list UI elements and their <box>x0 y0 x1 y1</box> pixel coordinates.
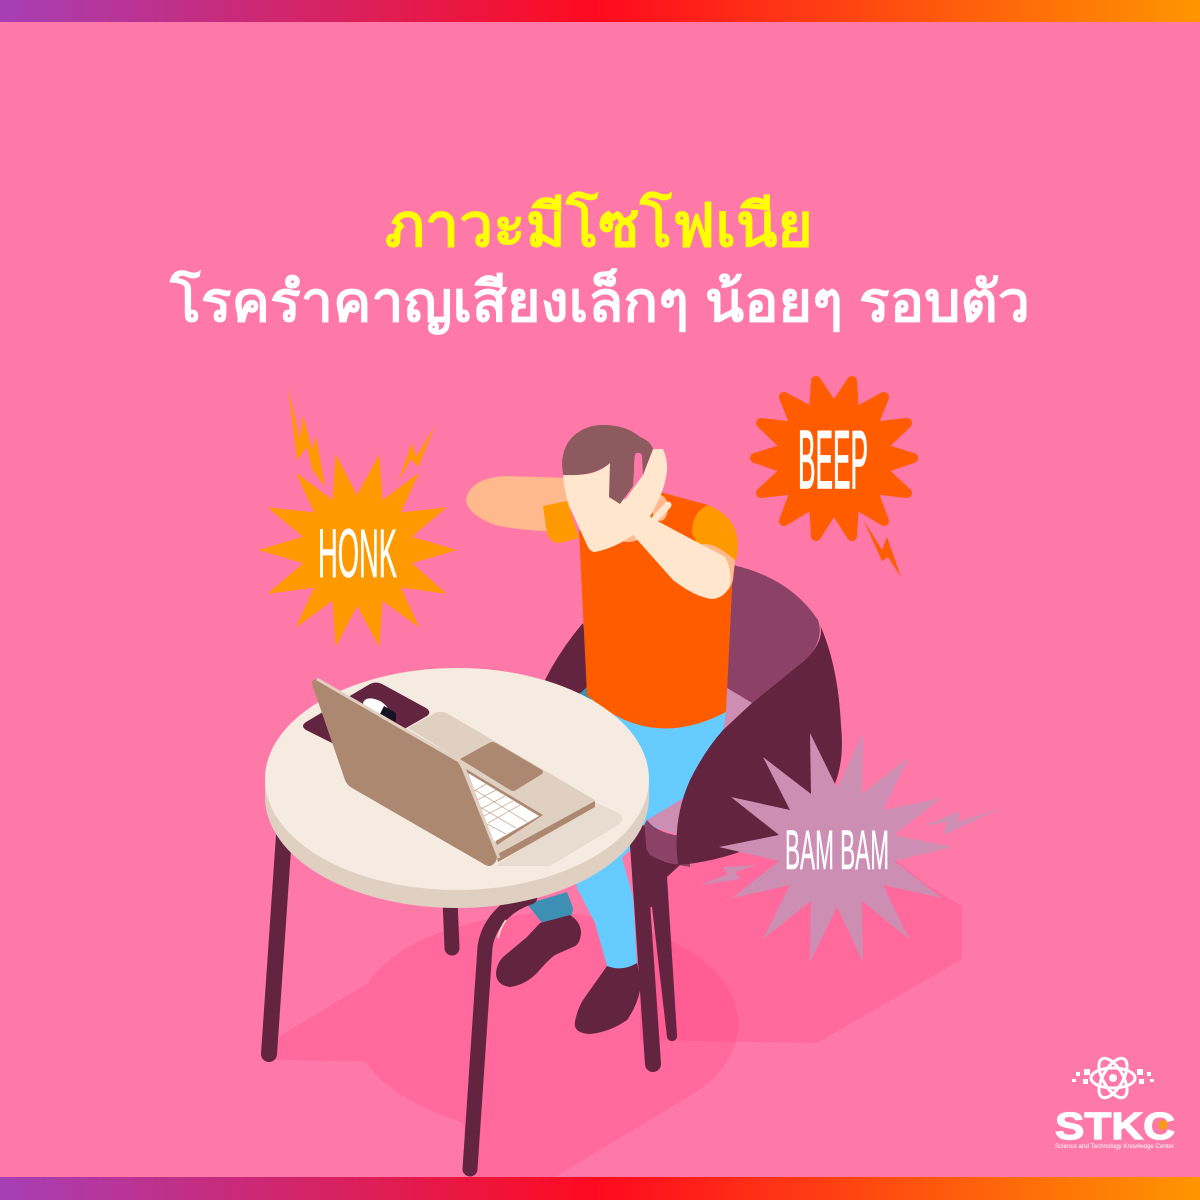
honk bolt right <box>398 426 435 482</box>
bam star <box>719 733 952 962</box>
chair legs <box>632 842 680 1041</box>
keyboard frame <box>466 769 543 845</box>
table top <box>265 668 649 890</box>
mouse body <box>360 694 392 722</box>
burst: bam bam: BAM BAM <box>785 818 889 881</box>
table edge <box>265 779 649 908</box>
mouse pad <box>303 682 429 760</box>
floor shadows <box>270 810 962 1177</box>
chair seat back <box>712 688 752 733</box>
chair back inner <box>727 565 820 703</box>
shirt <box>579 492 734 728</box>
sliver under table <box>498 920 506 938</box>
bottom gradient bar <box>0 1177 1200 1200</box>
beep bolt <box>863 519 901 577</box>
logo wordmark: STKC <box>1055 1106 1175 1148</box>
far thigh sliver <box>577 687 592 702</box>
laptop lid <box>312 680 497 866</box>
burst: beep <box>755 381 913 577</box>
left arm <box>466 476 570 532</box>
hair <box>562 425 653 504</box>
lid edge <box>317 679 499 858</box>
laptop base <box>408 712 595 858</box>
laptop <box>303 679 622 866</box>
shadow: table <box>270 913 738 1177</box>
far hand <box>652 495 668 521</box>
honk star <box>260 456 455 645</box>
trackpad <box>460 742 543 791</box>
burst: beep: BEEP <box>798 413 868 506</box>
burst: bam bam <box>700 733 1002 962</box>
logo pixels <box>1072 1069 1154 1084</box>
table <box>265 668 653 1169</box>
right upper arm <box>700 544 735 592</box>
logo tagline: Science and Technology Knowledge Center <box>1055 1144 1174 1150</box>
shadow: chair <box>640 810 962 1043</box>
logo: STKC <box>1055 1054 1175 1150</box>
chair seat top <box>647 785 705 838</box>
honk bolt left <box>288 387 325 487</box>
trousers <box>555 690 726 968</box>
dark trouser leg <box>527 892 573 924</box>
logo atom icon <box>1091 1054 1135 1102</box>
burst: honk: HONK <box>318 515 397 592</box>
title line 1: ภาวะมีโซโฟเนีย <box>385 190 813 259</box>
keyboard keys <box>468 773 539 842</box>
mouse <box>360 694 396 722</box>
shoe: front <box>575 962 641 1034</box>
laptop base edge <box>496 801 595 862</box>
chair left back <box>545 623 600 710</box>
chair seat front <box>636 820 690 867</box>
right sleeve <box>692 505 738 560</box>
chair shell <box>676 625 842 865</box>
neck <box>614 526 642 542</box>
top gradient bar <box>0 0 1200 22</box>
thumb <box>654 505 668 520</box>
title <box>169 190 1030 335</box>
beep star <box>755 381 913 536</box>
person <box>466 425 842 1041</box>
shoe: back <box>496 915 581 987</box>
chair back parts <box>545 565 820 733</box>
face and raised hand <box>563 449 730 599</box>
logo dot <box>1158 1120 1168 1130</box>
table legs <box>269 830 653 1169</box>
bam bolt right <box>923 808 1002 835</box>
left sleeve <box>543 501 579 543</box>
bam bolt left <box>700 865 758 885</box>
title line 2: โรครำคาญเสียงเล็กๆ น้อยๆ รอบตัว <box>169 267 1030 335</box>
laptop shadow <box>495 802 622 866</box>
keyboard <box>466 769 543 845</box>
burst: honk <box>260 387 455 645</box>
mouse shadow <box>380 706 396 722</box>
